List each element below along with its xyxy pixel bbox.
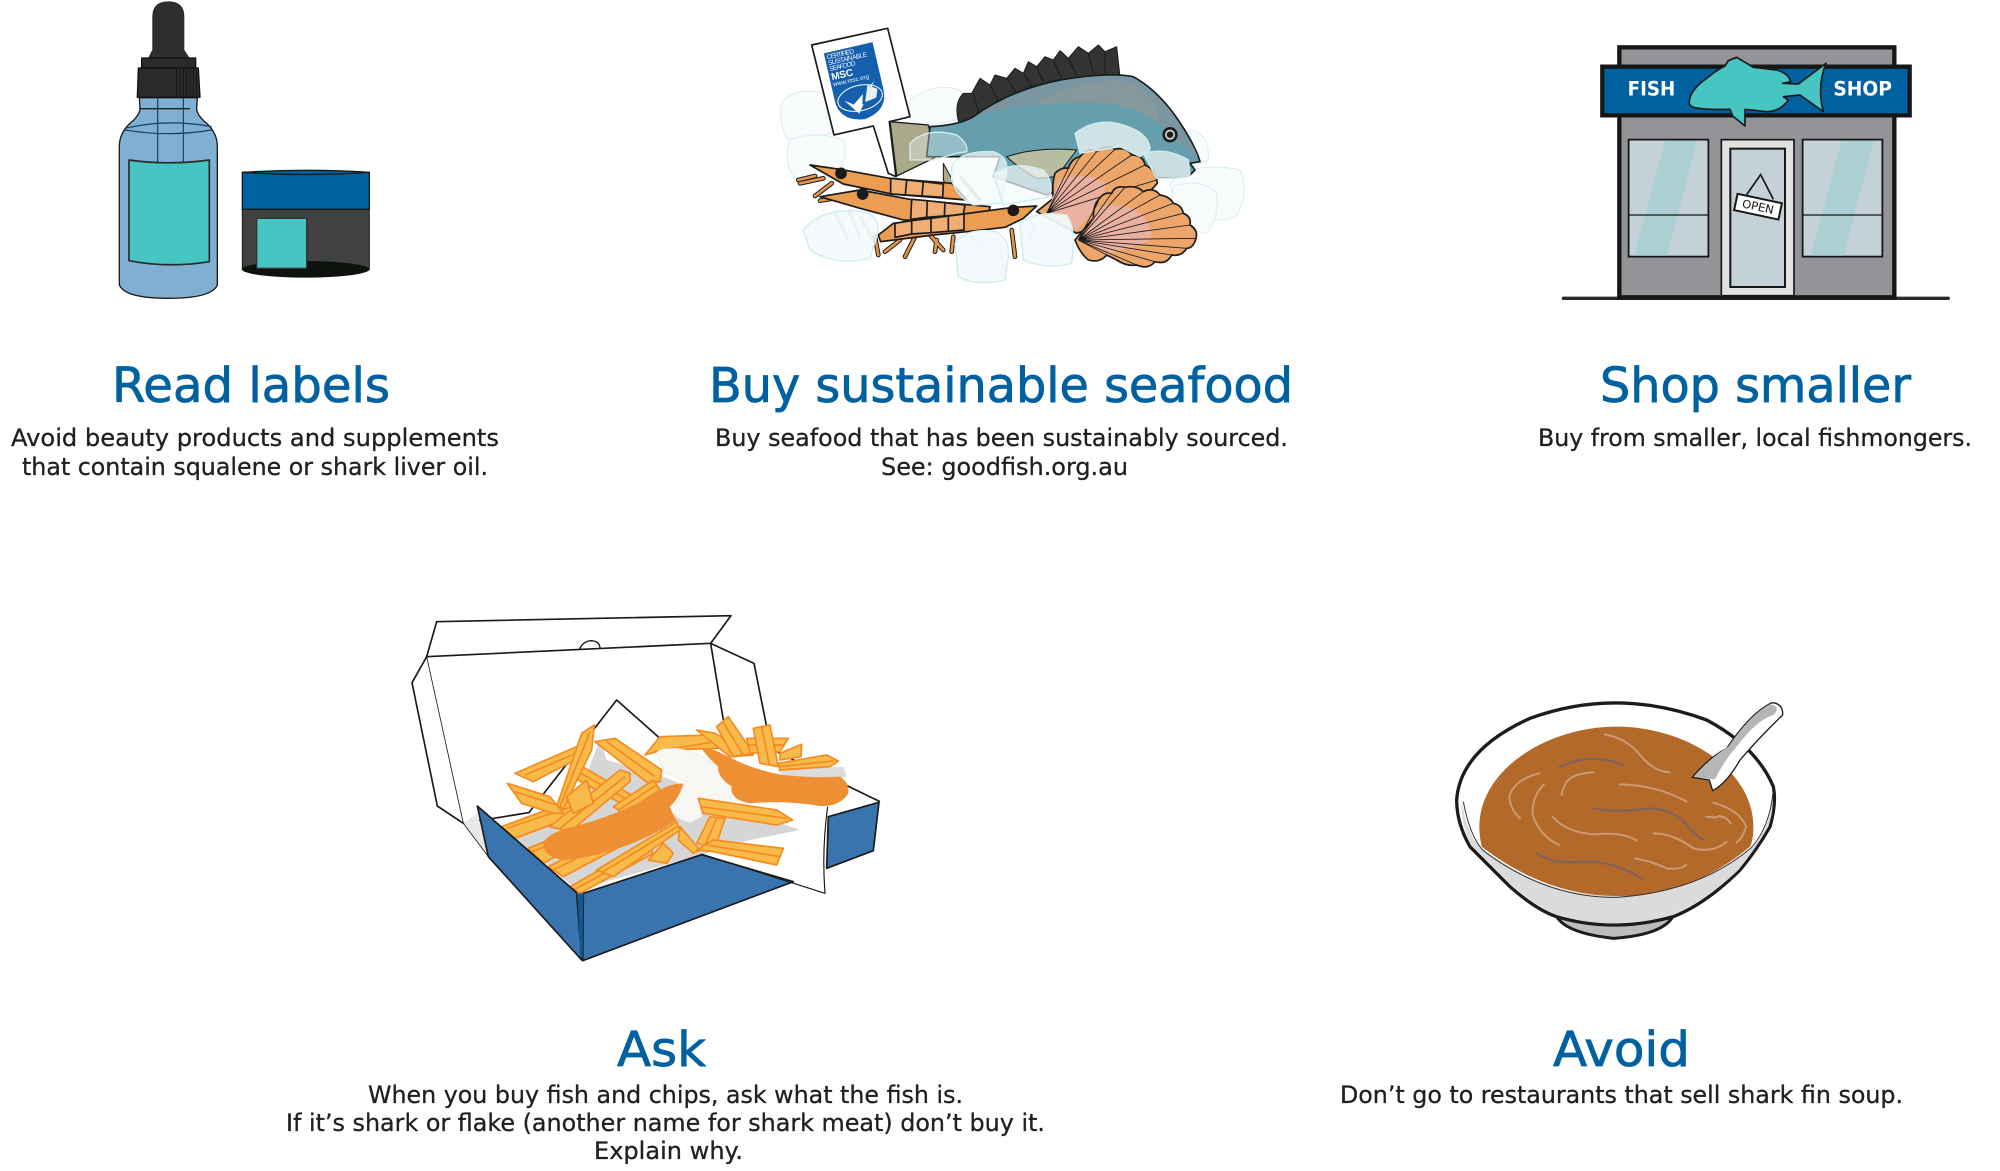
text block bbox=[11, 424, 499, 481]
panel: avoid bbox=[1340, 703, 1903, 1109]
sign fish bbox=[1689, 57, 1826, 126]
prawns bbox=[810, 165, 1037, 242]
text block: If it’s shark or flake (another name for shark meat) don’t buy it. bbox=[286, 1109, 1045, 1137]
heading: Ask bbox=[617, 1022, 706, 1078]
heading: Shop smaller bbox=[1600, 358, 1911, 414]
back ice cubes bbox=[781, 87, 1244, 233]
icon: dropper bottle bbox=[119, 2, 217, 298]
icon: fish shop bbox=[1563, 47, 1948, 298]
text block: See: goodfish.org.au bbox=[881, 453, 1128, 481]
text block: When you buy fish and chips, ask what the fish is. bbox=[368, 1081, 963, 1109]
dorsal fin bbox=[957, 45, 1120, 123]
front ice cubes bbox=[803, 122, 1190, 283]
panel: ask bbox=[286, 616, 1045, 1165]
MSC logo: www.msc.org bbox=[832, 74, 870, 89]
left window bbox=[1629, 140, 1708, 257]
MSC logo: CERTIFIED bbox=[826, 48, 855, 61]
panel: read labels bbox=[11, 2, 499, 481]
scallop shells bbox=[1037, 147, 1157, 233]
icon: seafood on ice with MSC sign bbox=[781, 28, 1244, 283]
soup swirls bbox=[1509, 734, 1746, 869]
box lid bbox=[412, 616, 880, 833]
text block: Avoid beauty products and supplements bbox=[11, 424, 499, 452]
open sign bbox=[1734, 194, 1782, 220]
MSC logo: SUSTAINABLE bbox=[828, 51, 869, 67]
open sign: OPEN bbox=[1741, 196, 1775, 217]
top chips bbox=[597, 817, 725, 877]
fish body bbox=[927, 75, 1200, 195]
heading: Buy sustainable seafood bbox=[709, 358, 1293, 414]
fish tail bbox=[890, 122, 937, 176]
icon: fish shop: FISH bbox=[1628, 78, 1675, 101]
prawn legs bbox=[798, 176, 1015, 257]
shop sign bbox=[1602, 67, 1910, 115]
icon: bowl of shark fin soup bbox=[1457, 703, 1783, 938]
paper flap bbox=[702, 807, 828, 893]
MSC logo bbox=[824, 42, 889, 125]
chips bbox=[502, 717, 838, 893]
text block bbox=[715, 424, 1288, 481]
heading: Avoid bbox=[1553, 1022, 1690, 1078]
chip shadows bbox=[510, 740, 800, 890]
panel: shop smaller bbox=[1538, 47, 1972, 452]
icon: box of fish and chips bbox=[412, 616, 880, 961]
icon: cream jar bbox=[242, 170, 369, 278]
door bbox=[1721, 140, 1794, 296]
icon: fish shop: SHOP bbox=[1833, 78, 1892, 101]
fish pieces bbox=[657, 748, 731, 823]
text block: Buy from smaller, local fishmongers. bbox=[1538, 424, 1972, 452]
box sides bbox=[827, 802, 879, 868]
MSC logo: MSC bbox=[830, 67, 854, 83]
panel: buy sustainable seafood bbox=[709, 28, 1293, 481]
text block bbox=[286, 1081, 1045, 1165]
text block: Explain why. bbox=[594, 1137, 743, 1165]
text block: Buy seafood that has been sustainably sourced. bbox=[715, 424, 1288, 452]
spoon bbox=[1692, 703, 1783, 791]
MSC logo: SEAFOOD bbox=[829, 60, 857, 73]
heading: Read labels bbox=[112, 358, 390, 414]
text block: Don’t go to restaurants that sell shark fin soup. bbox=[1340, 1081, 1903, 1109]
right window bbox=[1803, 140, 1882, 257]
MSC sign bbox=[812, 28, 910, 177]
text block: that contain squalene or shark liver oil. bbox=[22, 453, 488, 481]
paper bbox=[500, 700, 880, 893]
